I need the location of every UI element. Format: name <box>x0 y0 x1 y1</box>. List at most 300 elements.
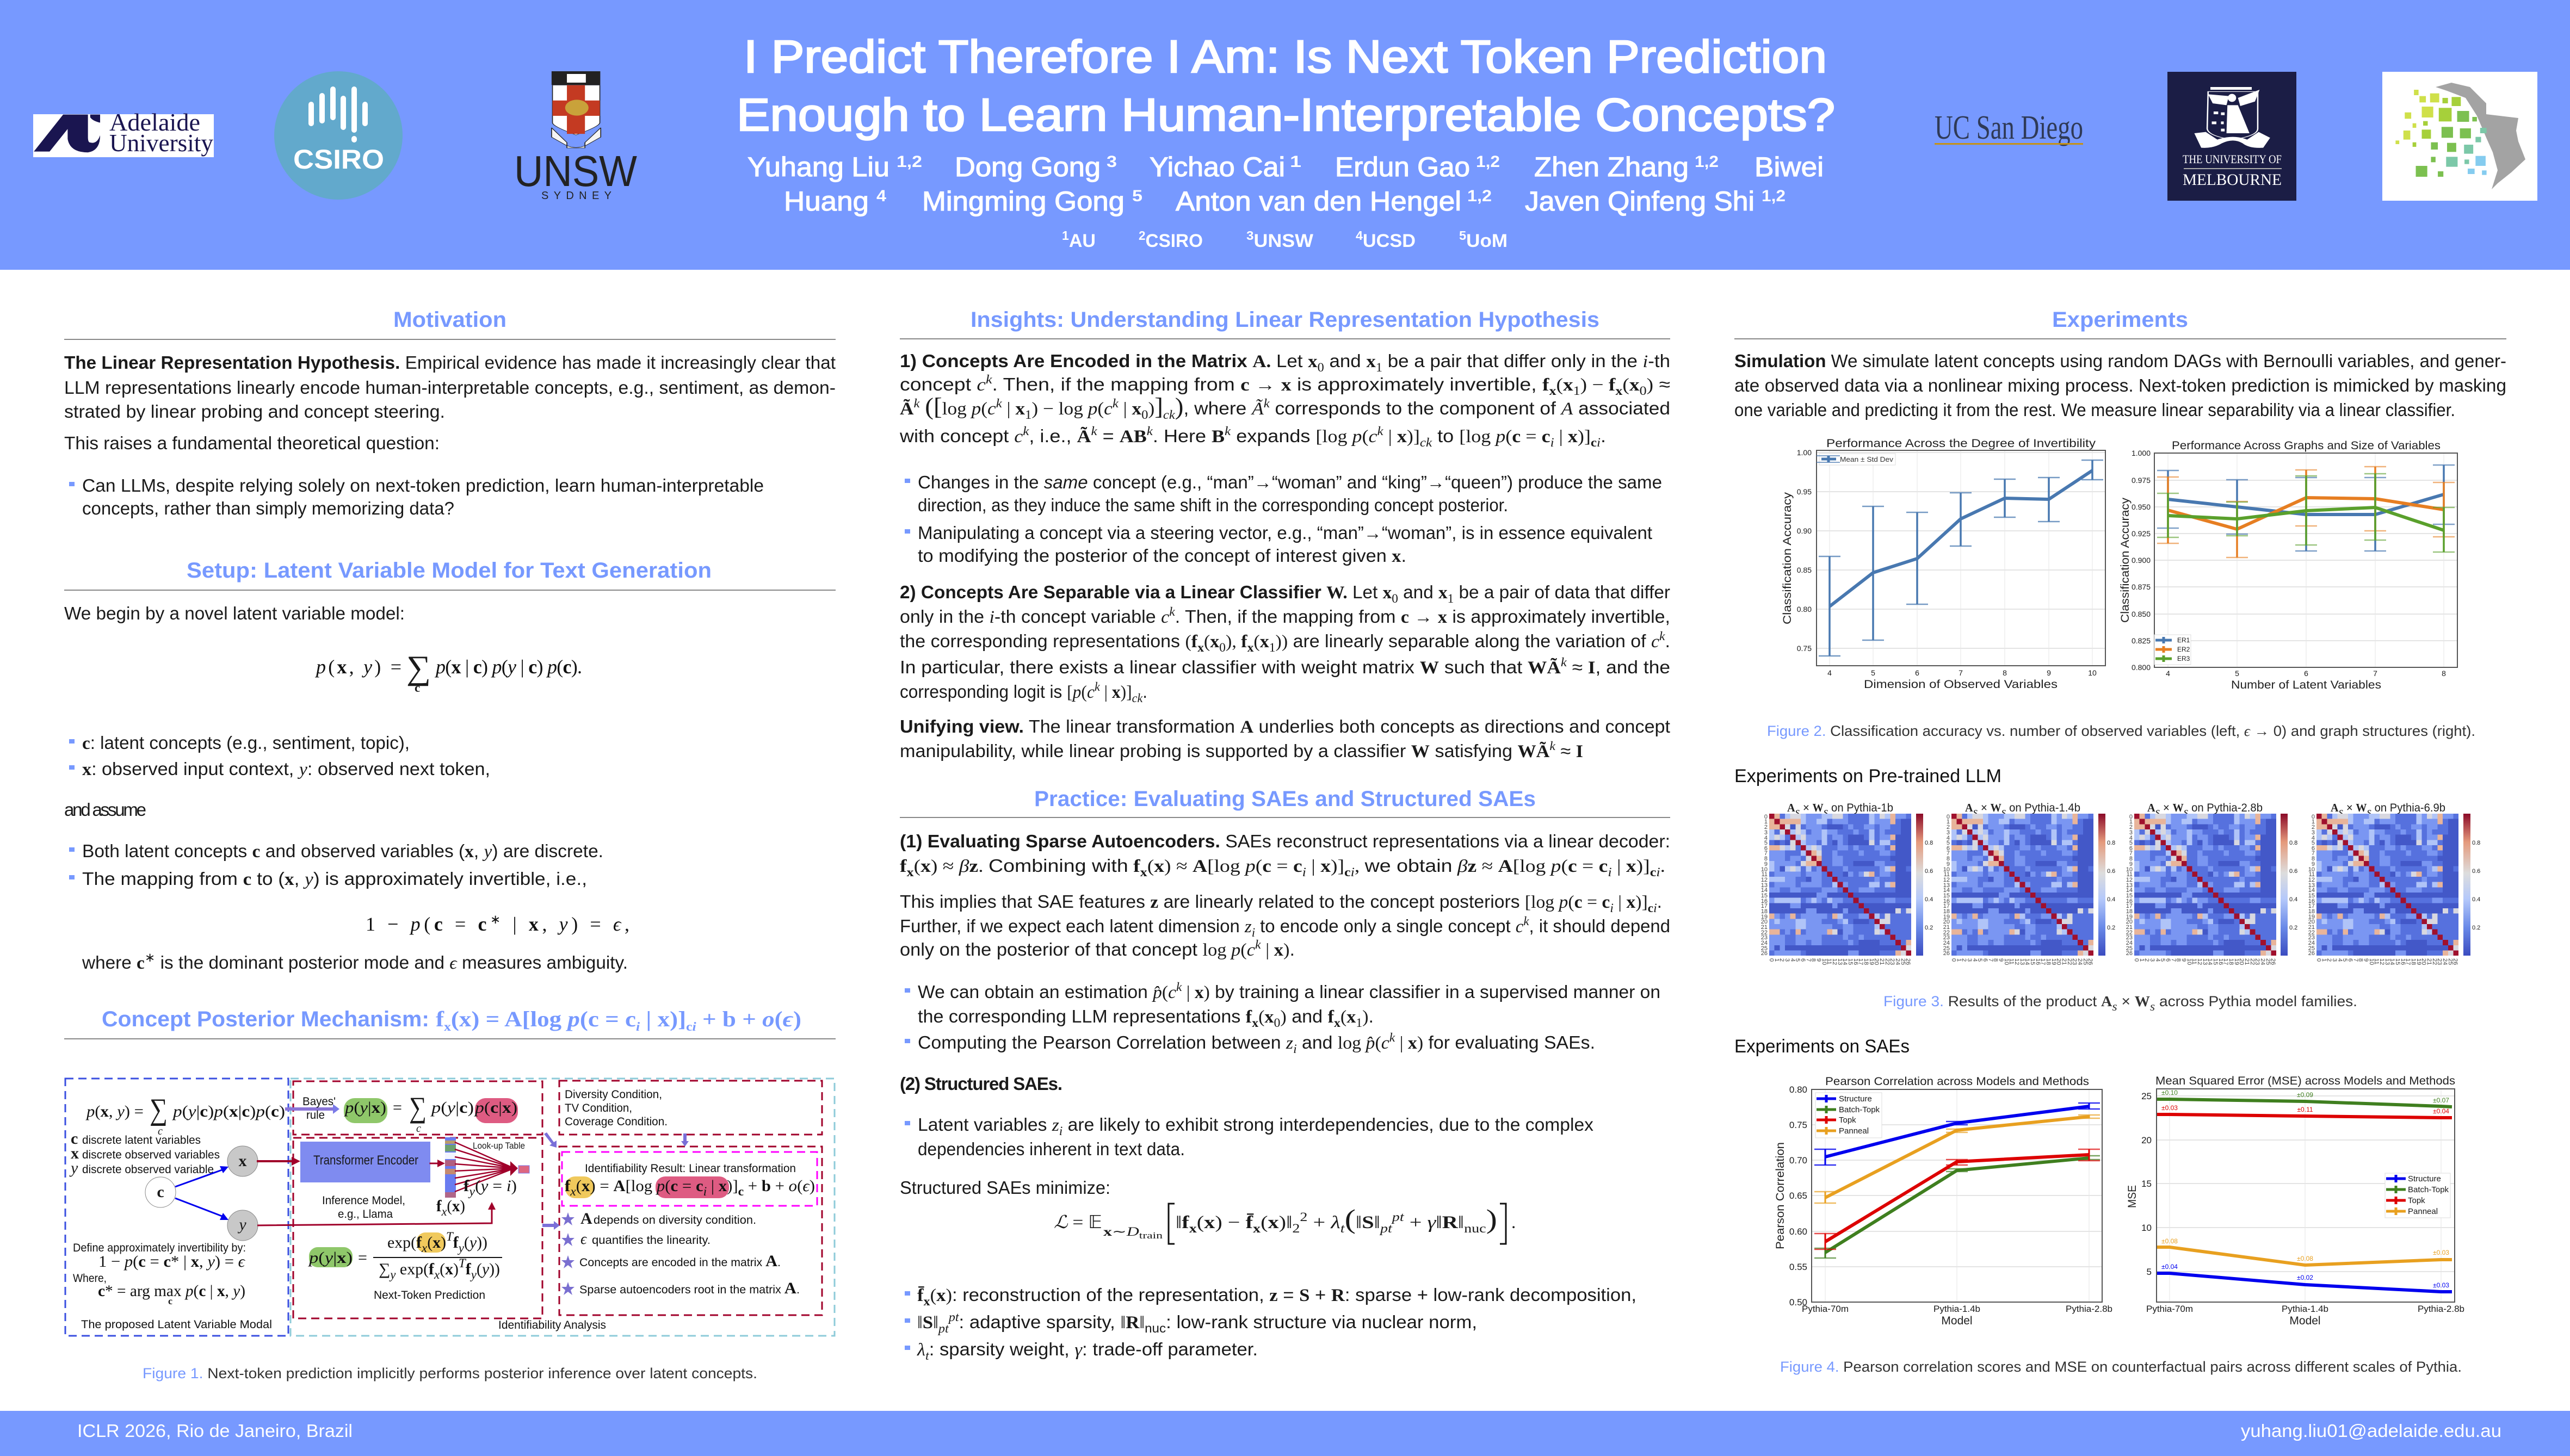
heatmap: Pythia-1b: 5 <box>1794 958 1801 962</box>
chart: performance across invertibility: 0.95 <box>1797 487 1812 496</box>
heatmap: Pythia-1.4b: 24 <box>1943 940 1950 946</box>
panel: motivation: The Linear Representation Hypothesis. Empirical evidence has made it increasingly clear that <box>64 352 836 373</box>
heatmap: Pythia-2.8b: 14 <box>2126 887 2133 894</box>
panel: insights: corresponding logit is [p(ck | x)]ck. <box>900 680 1147 705</box>
panel: proposed latent variable model: discrete observed variables <box>82 1149 220 1161</box>
panel: practice: Further, if we expect each latent dimension zi to encode only a single concept ck, it should depend <box>900 914 1670 939</box>
panel: identifiability analysis frame <box>291 1079 835 1336</box>
heatmap: Pythia-1b: 16 <box>1761 898 1768 904</box>
affiliations: 3UNSW <box>1246 228 1314 251</box>
heatmap: Pythia-1.4b: 5 <box>1947 840 1950 846</box>
heatmap: Pythia-1b: 18 <box>1761 908 1768 915</box>
authors: 1,2 <box>1762 187 1786 205</box>
heatmap: Pythia-6.9b: 16 <box>2400 958 2406 965</box>
heatmap: Pythia-2.8b: 26 <box>2270 958 2276 965</box>
panel: proposed latent variable model: Where, <box>73 1272 107 1285</box>
heatmap: Pythia-1.4b: 3 <box>1947 829 1950 836</box>
arrow: bayes rule: rule <box>306 1109 325 1122</box>
heatmap: Pythia-1.4b: As × Ws on Pythia-1.4b <box>1965 801 2080 819</box>
chart: mean squared error: Model <box>2289 1315 2321 1327</box>
panel: insights: 1) Concepts Are Encoded in the Matrix A. Let x0 and x1 be a pair that differ only in the i-th <box>900 351 1670 374</box>
bayes formula: c <box>416 1123 421 1135</box>
feature vector and look-up table: fy(y = i) <box>464 1177 517 1198</box>
heatmap: Pythia-6.9b: 10 <box>2308 866 2315 873</box>
heatmap: Pythia-1b: 9 <box>1815 958 1822 962</box>
chart: performance across graphs: 7 <box>2373 669 2377 678</box>
formula: joint distribution <box>314 649 582 695</box>
chart: pearson correlation: 0.80 <box>1789 1085 1807 1095</box>
logo: University of Melbourne <box>2167 72 2296 201</box>
legend: Batch-Topk <box>1839 1105 1880 1114</box>
series: topk <box>1814 1149 2100 1249</box>
heatmap: Pythia-6.9b: 0.4 <box>2472 896 2480 903</box>
panel: proposed latent variable model: c <box>71 1130 78 1148</box>
heatmap: Pythia-1b: 24 <box>1761 940 1768 946</box>
heatmap: Pythia-1.4b: 23 <box>1943 934 1950 941</box>
heatmap: Pythia-1b: As × Ws on Pythia-1b <box>1787 801 1893 819</box>
chart: performance across graphs: 0.900 <box>2132 556 2151 565</box>
panel: practice: λt: sparsity weight, γ: trade-off parameter. <box>917 1339 1258 1362</box>
caption: figure 3: Figure 3. Results of the product As × Ws across Pythia model families. <box>1883 993 2357 1013</box>
heatmap: Pythia-2.8b: 13 <box>2126 882 2133 889</box>
panel: motivation: strated by linear probing and concept steering. <box>64 401 445 422</box>
heatmap: Pythia-6.9b: 13 <box>2384 958 2390 965</box>
heatmap: Pythia-6.9b: 17 <box>2405 958 2411 965</box>
heatmap: Pythia-2.8b: 12 <box>2196 958 2203 965</box>
heatmap: Pythia-1.4b: 13 <box>2019 958 2025 965</box>
panel: practice: fx(x) ≈ βz. Combining with fx(x) ≈ A[log p(c = ci | x)]ci, we obtain βz ≈ A[log p(c = ci | x)]ci. <box>900 856 1665 879</box>
annotations: ±0.03 <box>2161 1104 2178 1112</box>
identifiability result <box>565 1162 815 1198</box>
heatmap: Pythia-6.9b: 1 <box>2321 958 2327 962</box>
formula: ambiguity: 1 − p(c = c ∗ | x, y) = ϵ, <box>366 913 629 935</box>
panel: proposed latent variable model <box>65 1079 288 1336</box>
heatmap: Pythia-2.8b: 11 <box>2191 958 2197 964</box>
chart: pearson correlation: 0.50 <box>1789 1297 1807 1308</box>
panel: motivation: concepts, rather than simply memorizing data? <box>82 498 454 518</box>
heatmap: Pythia-6.9b: 13 <box>2308 882 2315 889</box>
heatmap: Pythia-6.9b: 2 <box>2312 824 2315 831</box>
legend: Batch-Topk <box>2408 1185 2449 1194</box>
authors: Javen Qinfeng Shi <box>1525 186 1754 216</box>
heatmap: Pythia-1b: 20 <box>1873 958 1880 965</box>
series: structure <box>1814 1103 2100 1165</box>
logo: CSIRO: CSIRO <box>293 144 384 175</box>
panel: practice: ‖S‖ptpt: adaptive sparsity, ‖R‖nuc: low-rank structure via nuclear norm, <box>917 1310 1477 1335</box>
caption: figure 4: Figure 4. Pearson correlation scores and MSE on counterfactual pairs across different scales of Pythia. <box>1780 1359 2462 1375</box>
heading: experiments: Experiments <box>2052 308 2188 332</box>
chart: performance across invertibility: 4 <box>1827 668 1832 677</box>
panel: insights: manipulability, while linear probing is supported by a classifier W satisfying WÃk ≈ I <box>900 739 1583 761</box>
key takeaways with stars: quantifies the linearity. <box>592 1234 711 1247</box>
heatmap: Pythia-1b: 7 <box>1764 850 1768 857</box>
heatmap: Pythia-1.4b: 14 <box>2024 958 2030 965</box>
heatmap: Pythia-2.8b: 12 <box>2126 877 2133 883</box>
heatmap: Pythia-6.9b: 12 <box>2308 877 2315 883</box>
panel: practice: Computing the Pearson Correlation between zi and log p̂(ck | x) for evaluating SAEs. <box>918 1031 1595 1056</box>
chart: mean squared error: Pythia-70m <box>2146 1304 2193 1314</box>
heatmap: Pythia-1.4b: 2 <box>1961 958 1967 962</box>
authors: Zhen Zhang <box>1534 152 1689 182</box>
heatmap: Pythia-2.8b: 17 <box>2126 903 2133 909</box>
chart: performance across graphs: Performance Across Graphs and Size of Variables <box>2172 439 2441 452</box>
annotations: ±0.03 <box>2433 1281 2449 1289</box>
heatmap: Pythia-2.8b: 15 <box>2212 958 2219 965</box>
heatmap: Pythia-1b: 26 <box>1905 958 1911 965</box>
heatmap: Pythia-6.9b: 20 <box>2308 919 2315 925</box>
formula: joint distribution: p(x, y) = <box>314 656 401 678</box>
key takeaways with stars: A <box>580 1210 592 1228</box>
heatmap: Pythia-2.8b: 0.8 <box>2289 840 2297 846</box>
heatmap: Pythia-1b: 21 <box>1761 924 1768 931</box>
panel: proposed latent variable model: x <box>71 1144 79 1162</box>
legend: Structure <box>2408 1174 2441 1184</box>
heatmap: Pythia-6.9b: 0 <box>2312 814 2315 820</box>
panel: proposed latent variable model: c <box>158 1125 163 1137</box>
heatmap: Pythia-2.8b: 17 <box>2222 958 2229 965</box>
heatmap: Pythia-2.8b: 15 <box>2126 893 2133 899</box>
heatmap: Pythia-1.4b: 15 <box>2029 958 2036 965</box>
key takeaways with stars: ϵ <box>580 1231 588 1248</box>
chart: performance across graphs: 1.000 <box>2132 449 2151 457</box>
panel: practice: (2) Structured SAEs. <box>900 1074 1062 1094</box>
chart: pearson correlation: Pythia-70m <box>1802 1304 1849 1314</box>
heatmap: Pythia-1.4b: 9 <box>1998 958 2004 962</box>
next-token prediction formula: p(y|x) <box>308 1249 353 1267</box>
panel: proposed latent variable model: discrete observed variable <box>82 1163 214 1176</box>
series: panneal <box>1814 1115 2100 1203</box>
logo: UNSW Sydney: UNSW <box>514 147 637 195</box>
series: batch-topk <box>1814 1156 2100 1258</box>
authors: 1,2 <box>897 153 922 171</box>
heatmap: Pythia-2.8b: 5 <box>2159 958 2166 962</box>
heatmap: Pythia-1b: 25 <box>1761 945 1768 952</box>
chart: mean squared error: 20 <box>2141 1135 2152 1145</box>
heatmap: Pythia-1b: 0.6 <box>1925 868 1933 875</box>
heatmap: Pythia-2.8b: 21 <box>2244 958 2250 965</box>
affiliations <box>1062 228 1508 251</box>
heatmap: Pythia-2.8b: 9 <box>2129 861 2133 868</box>
heatmap: Pythia-6.9b: 18 <box>2308 908 2315 915</box>
chart: mean squared error: Pythia-1.4b <box>2282 1304 2328 1314</box>
panel: practice: f̄x(x): reconstruction of the representation, z = S + R: sparse + low-rank decomposition, <box>917 1285 1636 1308</box>
logo: University of Melbourne: THE UNIVERSITY OF <box>2183 152 2282 166</box>
heatmap: Pythia-1.4b: 24 <box>2077 958 2083 965</box>
key takeaways with stars: Concepts are encoded in the matrix A. <box>579 1252 781 1270</box>
heatmap: Pythia-1.4b: 5 <box>1976 958 1983 962</box>
heatmap: Pythia-6.9b: 9 <box>2312 861 2315 868</box>
heading: motivation: Motivation <box>393 308 506 332</box>
annotations: ±0.08 <box>2297 1255 2313 1262</box>
formula: structured SAE loss: ‖fx(x) − f̄x(x)‖22 + λt(‖S‖ptpt + γ‖R‖nuc) <box>1176 1204 1497 1235</box>
chart: mean squared error: 5 <box>2147 1267 2152 1277</box>
panel: setup latent variable model: x: observed input context, y: observed next token, <box>82 759 490 779</box>
heatmap: Pythia-1.4b: 20 <box>1943 919 1950 925</box>
heading: practice: Practice: Evaluating SAEs and Structured SAEs <box>1034 787 1536 811</box>
identifiability result: Identifiability Result: Linear transformation <box>585 1162 796 1175</box>
panel: proposed latent variable model: discrete latent variables <box>82 1134 201 1147</box>
heatmap: Pythia-2.8b: 8 <box>2175 958 2182 962</box>
chart: mean squared error: MSE <box>2126 1185 2139 1208</box>
annotations: ±0.04 <box>2161 1263 2178 1271</box>
legend: Panneal <box>2408 1207 2438 1216</box>
panel: practice: the corresponding LLM representations fx(x0) and fx(x1). <box>918 1006 1374 1030</box>
heatmap: Pythia-1.4b: 10 <box>1943 866 1950 873</box>
arrow: y to look-up table <box>257 1202 496 1225</box>
footer band: yuhang.liu01@adelaide.edu.au <box>2241 1421 2501 1441</box>
heatmap: Pythia-6.9b: 0.6 <box>2472 868 2480 875</box>
heatmap: Pythia-1b: 7 <box>1805 958 1812 962</box>
annotations: ±0.08 <box>2161 1237 2178 1245</box>
heatmap: Pythia-6.9b: 19 <box>2308 914 2315 920</box>
header band <box>0 0 2570 270</box>
title: I Predict Therefore I Am: Is Next Token Prediction <box>744 31 1827 82</box>
heatmap: Pythia-1.4b: 16 <box>2035 958 2041 965</box>
heatmap: Pythia-1.4b: 11 <box>1944 871 1950 878</box>
bayes formula <box>344 1091 518 1135</box>
heatmap: Pythia-1b: 6 <box>1764 845 1768 852</box>
heatmap: Pythia-1.4b: 18 <box>2045 958 2052 965</box>
heading: setup: Setup: Latent Variable Model for Text Generation <box>187 559 712 583</box>
heatmap: Pythia-1b: 10 <box>1821 958 1827 965</box>
chart: performance across invertibility: Mean ± Std Dev <box>1840 455 1894 463</box>
panel: insights <box>899 308 1670 761</box>
heatmap: Pythia-1b <box>1761 801 1933 965</box>
heatmap: Pythia-1.4b: 23 <box>2071 958 2078 965</box>
heatmap: Pythia-1.4b: 1 <box>1956 958 1962 962</box>
heatmap: Pythia-6.9b: 4 <box>2312 835 2315 841</box>
authors: Dong Gong <box>955 152 1101 182</box>
heading: insights: Insights: Understanding Linear Representation Hypothesis <box>971 308 1599 332</box>
heatmap: Pythia-2.8b: 7 <box>2129 850 2133 857</box>
heatmap: Pythia-1b: 0.2 <box>1925 925 1933 931</box>
heatmap: Pythia-6.9b: 24 <box>2442 958 2448 965</box>
heatmap: Pythia-1b: 2 <box>1778 958 1785 962</box>
heatmap: Pythia-2.8b: 11 <box>2127 871 2133 878</box>
panel: experiments intro <box>1734 308 2506 420</box>
chart: performance across graphs: 0.800 <box>2132 663 2151 672</box>
key takeaways with stars: Sparse autoencoders root in the matrix A. <box>579 1279 800 1297</box>
heatmap: Pythia-6.9b: 7 <box>2312 850 2315 857</box>
panel: practice: dependencies inherent in text data. <box>918 1139 1185 1159</box>
heatmap: Pythia-2.8b: 0 <box>2133 958 2140 962</box>
bayes formula: p(y|x) <box>344 1099 386 1117</box>
heatmap: Pythia-1.4b: 9 <box>1947 861 1950 868</box>
panel: insights: Unifying view. The linear transformation A underlies both concepts as directions and concept <box>900 716 1670 737</box>
heatmap: Pythia-1.4b: 14 <box>1943 887 1950 894</box>
heatmap: Pythia-2.8b: 20 <box>2126 919 2133 925</box>
heatmap: Pythia-1b: 3 <box>1784 958 1790 962</box>
heatmap: Pythia-1.4b: 7 <box>1987 958 1994 962</box>
panel: setup latent variable model: and assume <box>64 800 146 820</box>
heatmap: Pythia-2.8b: 23 <box>2126 934 2133 941</box>
heatmap: Pythia-1.4b: 12 <box>1943 877 1950 883</box>
panel: practice: This implies that SAE features z are linearly related to the concept posteriors [log p(c = ci | x)]ci. <box>900 891 1662 915</box>
heatmap: Pythia-1b: 15 <box>1847 958 1854 965</box>
panel: insights: 2) Concepts Are Separable via a Linear Classifier W. Let x0 and x1 be a pair of data that differ <box>900 582 1670 605</box>
heatmap: Pythia-2.8b: 1 <box>2139 958 2145 962</box>
chart: performance across invertibility: Performance Across the Degree of Invertibility <box>1826 437 2096 450</box>
footer band: ICLR 2026, Rio de Janeiro, Brazil <box>77 1421 353 1441</box>
graph nodes: x <box>238 1152 247 1170</box>
panel: experiments intro: Simulation We simulate latent concepts using random DAGs with Bernoulli variables, and gener- <box>1734 351 2506 371</box>
chart: performance across invertibility: 7 <box>1959 668 1963 677</box>
heatmap: Pythia-6.9b: 22 <box>2431 958 2438 965</box>
heatmap: Pythia-2.8b <box>2126 801 2297 965</box>
heatmap: Pythia-2.8b: 0.2 <box>2289 925 2297 931</box>
authors: 1 <box>1290 153 1301 171</box>
heatmap: Pythia-2.8b: 3 <box>2149 958 2155 962</box>
panel: proposed latent variable model: y <box>69 1159 78 1177</box>
caption: figure 2: Figure 2. Classification accuracy vs. number of observed variables (left, ϵ → 0) and graph structures (right). <box>1767 723 2475 739</box>
next-token prediction formula: ∑y exp(fx(x)Tfy(y)) <box>379 1256 500 1281</box>
heatmap: Pythia-1b: 5 <box>1764 840 1768 846</box>
heatmap: Pythia-1b: 13 <box>1761 882 1768 889</box>
panel: proposed latent variable model: ∑ <box>150 1093 168 1126</box>
heatmap: Pythia-2.8b: 0 <box>2129 814 2133 820</box>
heatmap: Pythia-1.4b: 26 <box>2087 958 2093 965</box>
panel: insights: In particular, there exists a linear classifier with weight matrix W such that WÃk ≈ I, and the <box>900 655 1670 678</box>
formula: joint distribution: c <box>415 681 420 695</box>
chart: performance across invertibility: 0.75 <box>1797 644 1812 653</box>
logo: Adelaide University <box>33 108 214 157</box>
heatmap: Pythia-1b: 26 <box>1761 950 1768 957</box>
authors: 5 <box>1132 187 1142 205</box>
chart: performance across graphs: ER3 <box>2177 655 2190 662</box>
heatmap: Pythia-2.8b: 19 <box>2126 914 2133 920</box>
panel: insights: with concept ck, i.e., Ãk = ABk. Here Bk expands [log p(ck | x)]ck to [log p(c = ci | x)]ci. <box>899 424 1606 449</box>
next-token prediction formula: Next-Token Prediction <box>374 1289 485 1302</box>
heatmap: Pythia-6.9b: 15 <box>2394 958 2401 965</box>
heatmap: Pythia-1.4b: 0.8 <box>2107 840 2115 846</box>
subheading: pre-trained LLM: Experiments on Pre-trained LLM <box>1734 766 2001 786</box>
authors <box>747 152 1824 216</box>
heatmap: Pythia-6.9b: 5 <box>2342 958 2348 962</box>
next-token prediction formula: exp(fx(x)Tfy(y)) <box>387 1230 487 1255</box>
heatmap: Pythia-1b: 1 <box>1764 819 1768 825</box>
heatmap: Pythia-1b: 8 <box>1810 958 1817 962</box>
chart: performance across invertibility: 5 <box>1871 668 1875 677</box>
heatmap: Pythia-6.9b: 16 <box>2308 898 2315 904</box>
panel: insights: concept ck. Then, if the mapping from c → x is approximately invertible, fx(x1) − fx(x0) ≈ <box>900 373 1670 398</box>
heatmap: Pythia-6.9b: 7 <box>2352 958 2359 962</box>
annotations: ±0.07 <box>2433 1096 2449 1104</box>
affiliations: 2CSIRO <box>1139 228 1203 251</box>
conditions <box>565 1088 668 1128</box>
subheading: SAEs: Experiments on SAEs <box>1734 1036 1910 1057</box>
heatmap: Pythia-1.4b: 2 <box>1947 824 1950 831</box>
feature vector and look-up table: Inference Model, <box>322 1194 405 1207</box>
heatmap: Pythia-6.9b: 21 <box>2426 958 2432 965</box>
heatmap: Pythia-6.9b: 11 <box>2373 958 2380 964</box>
heatmap: Pythia-1b: 22 <box>1761 930 1768 936</box>
chart: pearson correlation: 0.75 <box>1789 1120 1807 1130</box>
heatmap: Pythia-2.8b: 25 <box>2126 945 2133 952</box>
heatmap: Pythia-6.9b: As × Ws on Pythia-6.9b <box>2331 801 2445 819</box>
heatmap: Pythia-1.4b: 10 <box>2003 958 2010 965</box>
panel: motivation: This raises a fundamental theoretical question: <box>64 433 440 453</box>
heatmap: Pythia-1b: 21 <box>1879 958 1885 965</box>
chart: performance across graphs <box>2119 439 2457 691</box>
feature vector and look-up table: Look-up Table <box>473 1141 525 1151</box>
heatmap: Pythia-1.4b: 4 <box>1972 958 1978 962</box>
heatmap: Pythia-1b: 25 <box>1900 958 1906 965</box>
feature vector and look-up table: fx(x) <box>436 1197 465 1218</box>
heatmap: Pythia-6.9b: 12 <box>2379 958 2385 965</box>
chart: performance across graphs: 0.925 <box>2132 529 2151 538</box>
heatmap: Pythia-2.8b: 2 <box>2129 824 2133 831</box>
logo: UC San Diego: UC San Diego <box>1935 109 2083 146</box>
heatmap: Pythia-6.9b: 2 <box>2326 958 2332 962</box>
heatmap: Pythia-1.4b: 16 <box>1943 898 1950 904</box>
authors: 4 <box>876 187 886 205</box>
heatmap: Pythia-6.9b: 3 <box>2331 958 2338 962</box>
chart: performance across graphs: Classification Accuracy <box>2119 497 2132 623</box>
chart: performance across invertibility: 9 <box>2047 668 2051 677</box>
panel: practice: (1) Evaluating Sparse Autoencoders. SAEs reconstruct representations via a linear decoder: <box>900 831 1670 851</box>
chart: performance across graphs: 6 <box>2304 669 2308 678</box>
heatmap: Pythia-1b: 2 <box>1764 824 1768 831</box>
formula: structured SAE loss: ℒ = 𝔼 <box>1054 1213 1102 1232</box>
authors: Yichao Cai <box>1150 152 1285 182</box>
bayes formula: p(c|x) <box>474 1099 517 1117</box>
heatmap: Pythia-1.4b: 8 <box>1992 958 1999 962</box>
bayes formula: ∑ <box>409 1091 427 1124</box>
graph nodes: y <box>237 1216 246 1234</box>
bayes formula: p(y|c) <box>430 1099 474 1117</box>
chart: performance across invertibility: 10 <box>2088 668 2097 677</box>
legend: Structure <box>1839 1094 1872 1104</box>
heatmap: Pythia-1.4b: 19 <box>1943 914 1950 920</box>
heatmap: Pythia-1b: 23 <box>1761 934 1768 941</box>
heatmap: Pythia-1b: 4 <box>1789 958 1796 962</box>
authors: 1,2 <box>1467 187 1492 205</box>
authors: Anton van den Hengel <box>1176 186 1461 216</box>
heatmap: Pythia-2.8b: 3 <box>2129 829 2133 836</box>
heatmap: Pythia-2.8b: 10 <box>2126 866 2133 873</box>
panel: proposed latent variable model: Define approximately invertibility by: <box>73 1242 246 1254</box>
identifiability result: fx(x) = A[log p(c = ci | x)]c + b + o(ϵ) <box>565 1177 815 1198</box>
legend: Panneal <box>1839 1126 1869 1136</box>
authors: Yuhang Liu <box>747 152 889 182</box>
heatmap: Pythia-6.9b: 0.8 <box>2472 840 2480 846</box>
chart: performance across invertibility <box>1781 437 2105 691</box>
heatmap: Pythia-6.9b: 18 <box>2410 958 2417 965</box>
chart: mean squared error: 25 <box>2141 1091 2152 1101</box>
heatmap: Pythia-2.8b: 16 <box>2126 898 2133 904</box>
heatmap: Pythia-1.4b: 4 <box>1947 835 1950 841</box>
heatmap: Pythia-1b: 11 <box>1826 958 1832 964</box>
heatmap: Pythia-6.9b: 25 <box>2447 958 2454 965</box>
legend: Topk <box>1839 1116 1856 1125</box>
heatmap: Pythia-2.8b: 13 <box>2202 958 2208 965</box>
panel: proposed latent variable model: c* = arg max p(c | x, y) <box>98 1282 245 1300</box>
panel: proposed latent variable model: The proposed Latent Variable Modal <box>81 1318 272 1331</box>
heatmap: Pythia-1b: 0 <box>1768 958 1775 962</box>
panel: proposed latent variable model: p(x, y) = <box>85 1102 144 1120</box>
heatmap: Pythia-1.4b: 19 <box>2050 958 2057 965</box>
panel: identifiability analysis frame: Identifiability Analysis <box>498 1319 606 1331</box>
chart: pearson correlation: 0.70 <box>1789 1155 1807 1166</box>
heatmap: Pythia-2.8b: 24 <box>2126 940 2133 946</box>
chart: performance across graphs: ER1 <box>2177 636 2190 644</box>
heatmap: Pythia-1b: 18 <box>1863 958 1869 965</box>
heatmap: Pythia-1b: 13 <box>1837 958 1843 965</box>
authors: 3 <box>1107 153 1117 171</box>
heatmap: Pythia-1b: 0 <box>1764 814 1768 820</box>
heatmap: Pythia-2.8b: 6 <box>2129 845 2133 852</box>
graph nodes: c <box>157 1183 164 1201</box>
